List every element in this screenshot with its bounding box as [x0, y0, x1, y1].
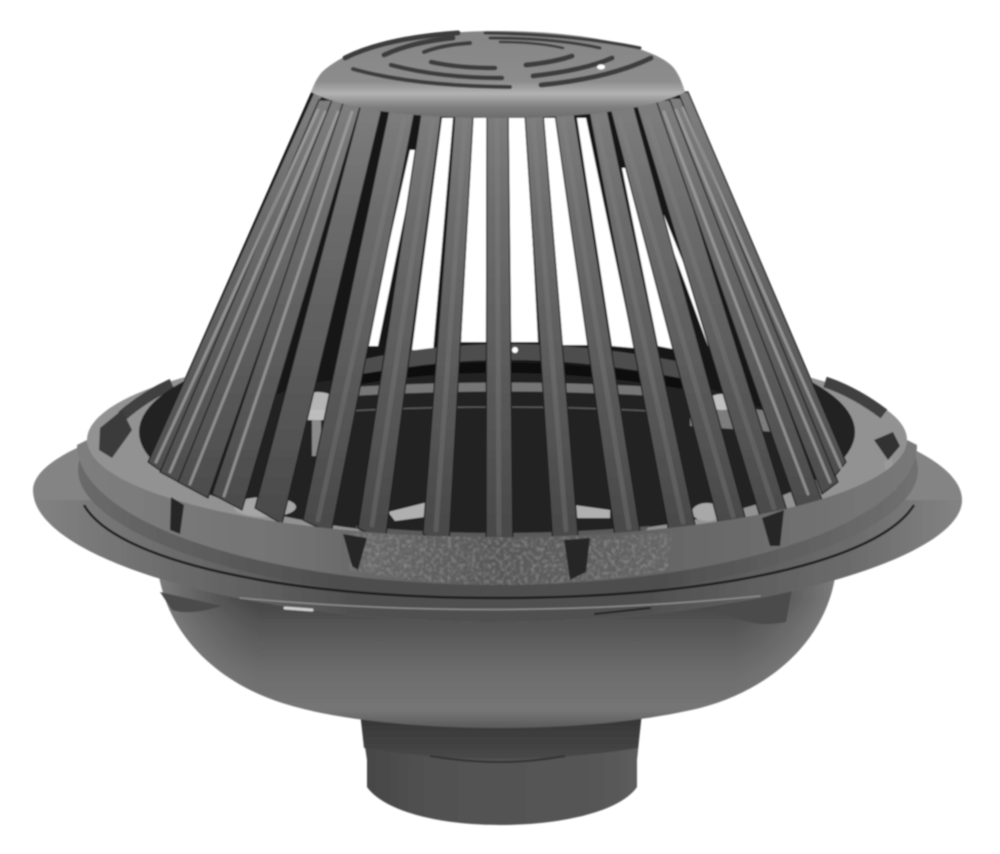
- openings between ribs: [366, 118, 718, 352]
- back ring sight hole: [512, 347, 518, 353]
- ring notches: [170, 497, 784, 580]
- flange highlights: [240, 596, 760, 614]
- rib shading: [318, 120, 774, 534]
- drain bowl: [158, 570, 836, 728]
- dome cap hole: [597, 64, 605, 70]
- outer flange: [32, 448, 963, 612]
- drain interior: [139, 327, 855, 537]
- ring side blocks: [99, 410, 900, 490]
- strainer ribs: [148, 92, 846, 548]
- dome cage backing: [148, 90, 846, 462]
- cast texture on ring face: [350, 532, 672, 585]
- seal band: [78, 350, 918, 600]
- mounting bolts: [234, 392, 775, 521]
- outer rib highlights: [156, 108, 841, 496]
- ring back wall: [122, 382, 884, 416]
- interior floor: [355, 526, 650, 540]
- seal groove line: [84, 505, 914, 598]
- pipe outlet: [360, 712, 642, 825]
- ring front face: [77, 440, 917, 585]
- back ring seen through the cage: [345, 352, 690, 385]
- dome cap slots: [345, 33, 651, 87]
- ring top surface: [87, 343, 907, 537]
- interior casting highlights: [388, 502, 610, 521]
- inner ledge: [330, 387, 670, 412]
- bowl lugs: [160, 590, 792, 624]
- dome cap: [311, 31, 685, 118]
